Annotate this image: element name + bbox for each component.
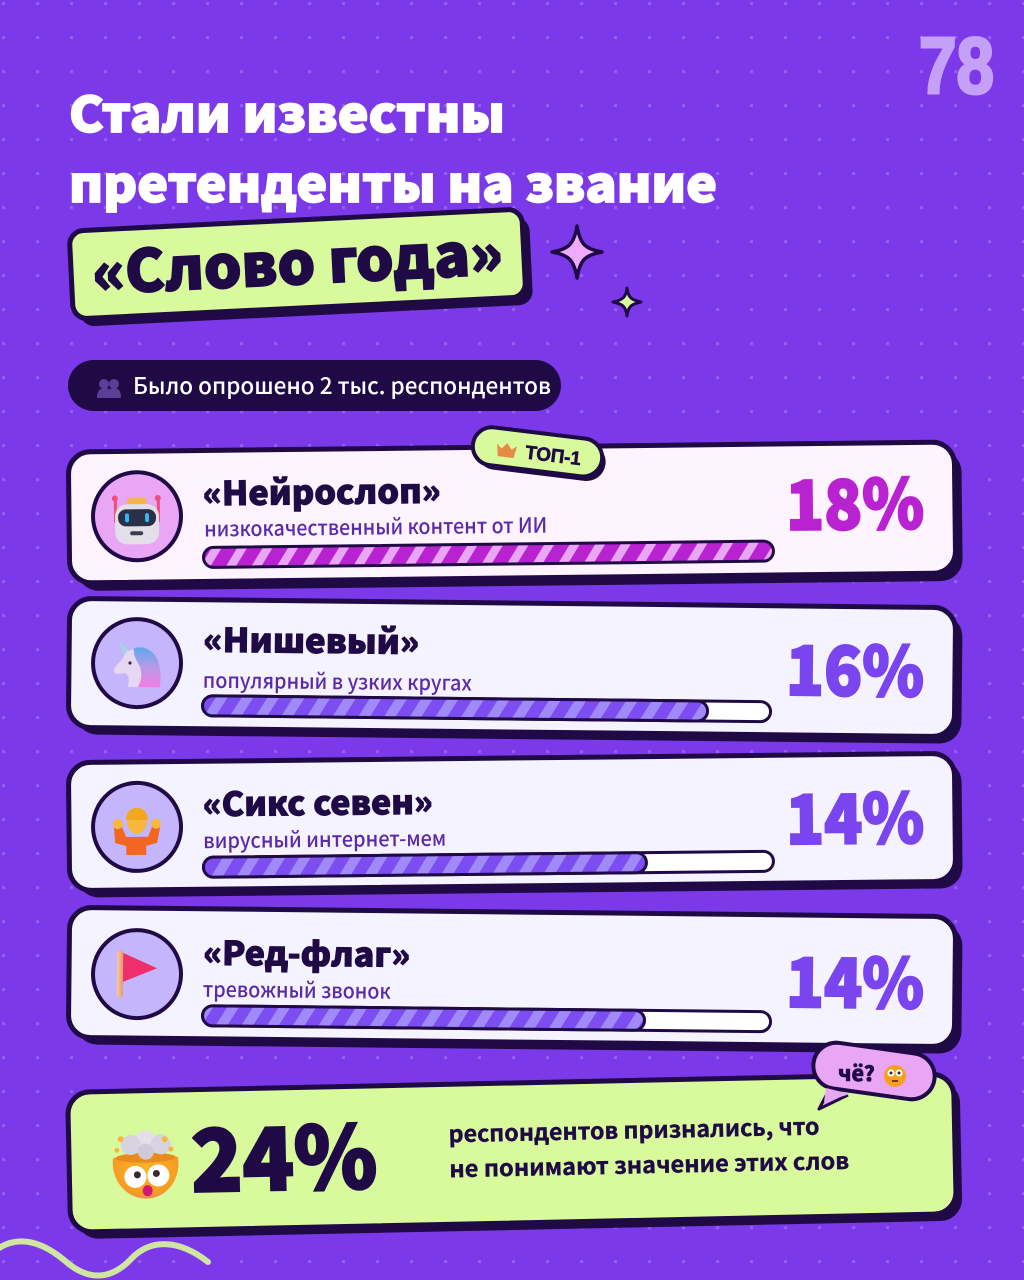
progress bar — [202, 696, 771, 722]
card 3: Сикс севен — [68, 753, 963, 898]
icon: red flag — [93, 930, 181, 1019]
logo 78: 78 — [919, 21, 994, 110]
icon: busts — [97, 379, 121, 398]
explanatory text: не понимают значение этих слов — [449, 1142, 850, 1184]
icon: shrugging person — [93, 782, 181, 871]
progress bar — [203, 541, 774, 568]
word and definition: «Сикс севен» — [203, 776, 433, 826]
icon: worried face — [884, 1065, 906, 1087]
speech bubble: чё?: чё? — [838, 1058, 875, 1088]
icon: exploding head — [112, 1130, 179, 1199]
explanatory text: респондентов признались, что — [448, 1108, 820, 1149]
word and definition — [202, 464, 547, 544]
icon: robot — [93, 472, 182, 561]
icon: small sparkle — [613, 288, 641, 316]
progress bar — [202, 1006, 771, 1032]
highlighted label: Слово года: «Слово года» — [90, 207, 505, 311]
title — [69, 76, 717, 217]
word and definition: низкокачественный контент от ИИ — [204, 510, 547, 543]
percent: 16% — [786, 616, 925, 716]
word and definition — [203, 776, 446, 855]
word and definition: вирусный интернет-мем — [203, 823, 446, 855]
word and definition: популярный в узких кругах — [203, 665, 472, 698]
icon: large sparkle — [552, 226, 602, 278]
word and definition: «Нейрослоп» — [202, 465, 441, 516]
explanatory text — [448, 1107, 850, 1184]
icon: crown — [496, 442, 517, 458]
word and definition: тревожный звонок — [203, 974, 391, 1006]
word and definition — [203, 927, 410, 1006]
card 1: Нейрослоп — [68, 442, 963, 591]
word and definition — [203, 614, 473, 698]
percent: 18% — [785, 449, 924, 550]
respondents pill: Было опрошено 2 тыс. респондентов — [133, 367, 551, 401]
percent: 14% — [785, 928, 925, 1028]
progress bar — [203, 851, 774, 877]
card 4: Ред-флаг — [68, 907, 963, 1054]
card 2: Нишевый — [68, 598, 963, 744]
icon: unicorn — [93, 619, 181, 708]
percent: 14% — [785, 764, 924, 864]
respondents pill — [68, 360, 561, 411]
word and definition: «Нишевый» — [203, 614, 420, 664]
word and definition: «Ред-флаг» — [203, 927, 410, 977]
decorative wave — [0, 1241, 208, 1276]
title: Стали известны — [69, 76, 505, 147]
badge: ТОП-1 — [470, 425, 608, 483]
big percent: 24% — [190, 1088, 378, 1217]
speech bubble: чё? — [810, 1040, 938, 1109]
summary panel: 24% — [68, 1074, 963, 1239]
badge: ТОП-1: ТОП-1 — [524, 443, 583, 470]
title: претенденты на звание — [69, 146, 717, 217]
